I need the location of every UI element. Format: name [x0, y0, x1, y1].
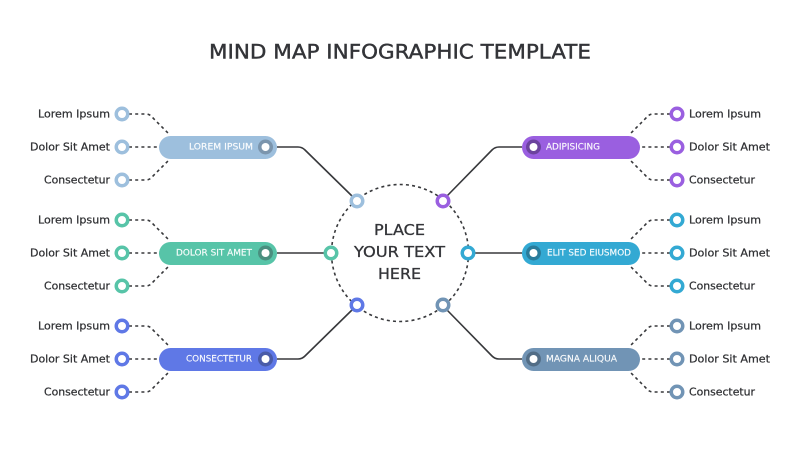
branch: magna aliqua: MAGNA ALIQUA — [546, 354, 618, 364]
branch: elit sed eiusmod: Consectetur — [689, 280, 755, 292]
hub nodes — [325, 195, 474, 311]
title: MIND MAP INFOGRAPHIC TEMPLATE — [209, 40, 591, 64]
branch: consectetur — [30, 320, 277, 398]
branch: consectetur: CONSECTETUR — [186, 354, 252, 364]
branch: elit sed eiusmod: ELIT SED EIUSMOD — [547, 248, 631, 258]
branch: adipisicing: Lorem Ipsum — [689, 108, 761, 120]
central hub — [277, 147, 522, 359]
branch: lorem ipsum: LOREM IPSUM — [189, 142, 253, 152]
connector lines — [277, 147, 522, 359]
center text: PLACE — [374, 221, 425, 239]
branch: adipisicing — [522, 108, 771, 186]
branch: adipisicing: Dolor Sit Amet — [689, 140, 771, 154]
branch: magna aliqua: Consectetur — [689, 386, 755, 398]
center text: HERE — [378, 265, 421, 283]
branch: adipisicing: ADIPISICING — [546, 142, 600, 152]
branch: lorem ipsum: Lorem Ipsum — [38, 108, 110, 120]
branch: consectetur: Lorem Ipsum — [38, 320, 110, 332]
center text — [353, 221, 446, 283]
branch: dolor sit amet: Lorem Ipsum — [38, 214, 110, 226]
dashed circle — [332, 184, 468, 322]
branch: elit sed eiusmod — [522, 214, 771, 292]
branch: magna aliqua — [522, 320, 771, 398]
branch: consectetur: Consectetur — [44, 386, 110, 398]
branch: lorem ipsum: Dolor Sit Amet — [30, 140, 111, 154]
branch: magna aliqua: Lorem Ipsum — [689, 320, 761, 332]
branch: adipisicing: Consectetur — [689, 174, 755, 186]
branch: lorem ipsum: Consectetur — [44, 174, 110, 186]
branch: dolor sit amet: Dolor Sit Amet — [30, 246, 111, 260]
branch: dolor sit amet — [30, 214, 277, 292]
branch: elit sed eiusmod: Lorem Ipsum — [689, 214, 761, 226]
branch: dolor sit amet: Consectetur — [44, 280, 110, 292]
center text: YOUR TEXT — [353, 243, 446, 261]
branch: elit sed eiusmod: Dolor Sit Amet — [689, 246, 771, 260]
branch: consectetur: Dolor Sit Amet — [30, 352, 111, 366]
branch: dolor sit amet: DOLOR SIT AMET — [176, 248, 252, 258]
branch: magna aliqua: Dolor Sit Amet — [689, 352, 771, 366]
branch: lorem ipsum — [30, 108, 277, 186]
